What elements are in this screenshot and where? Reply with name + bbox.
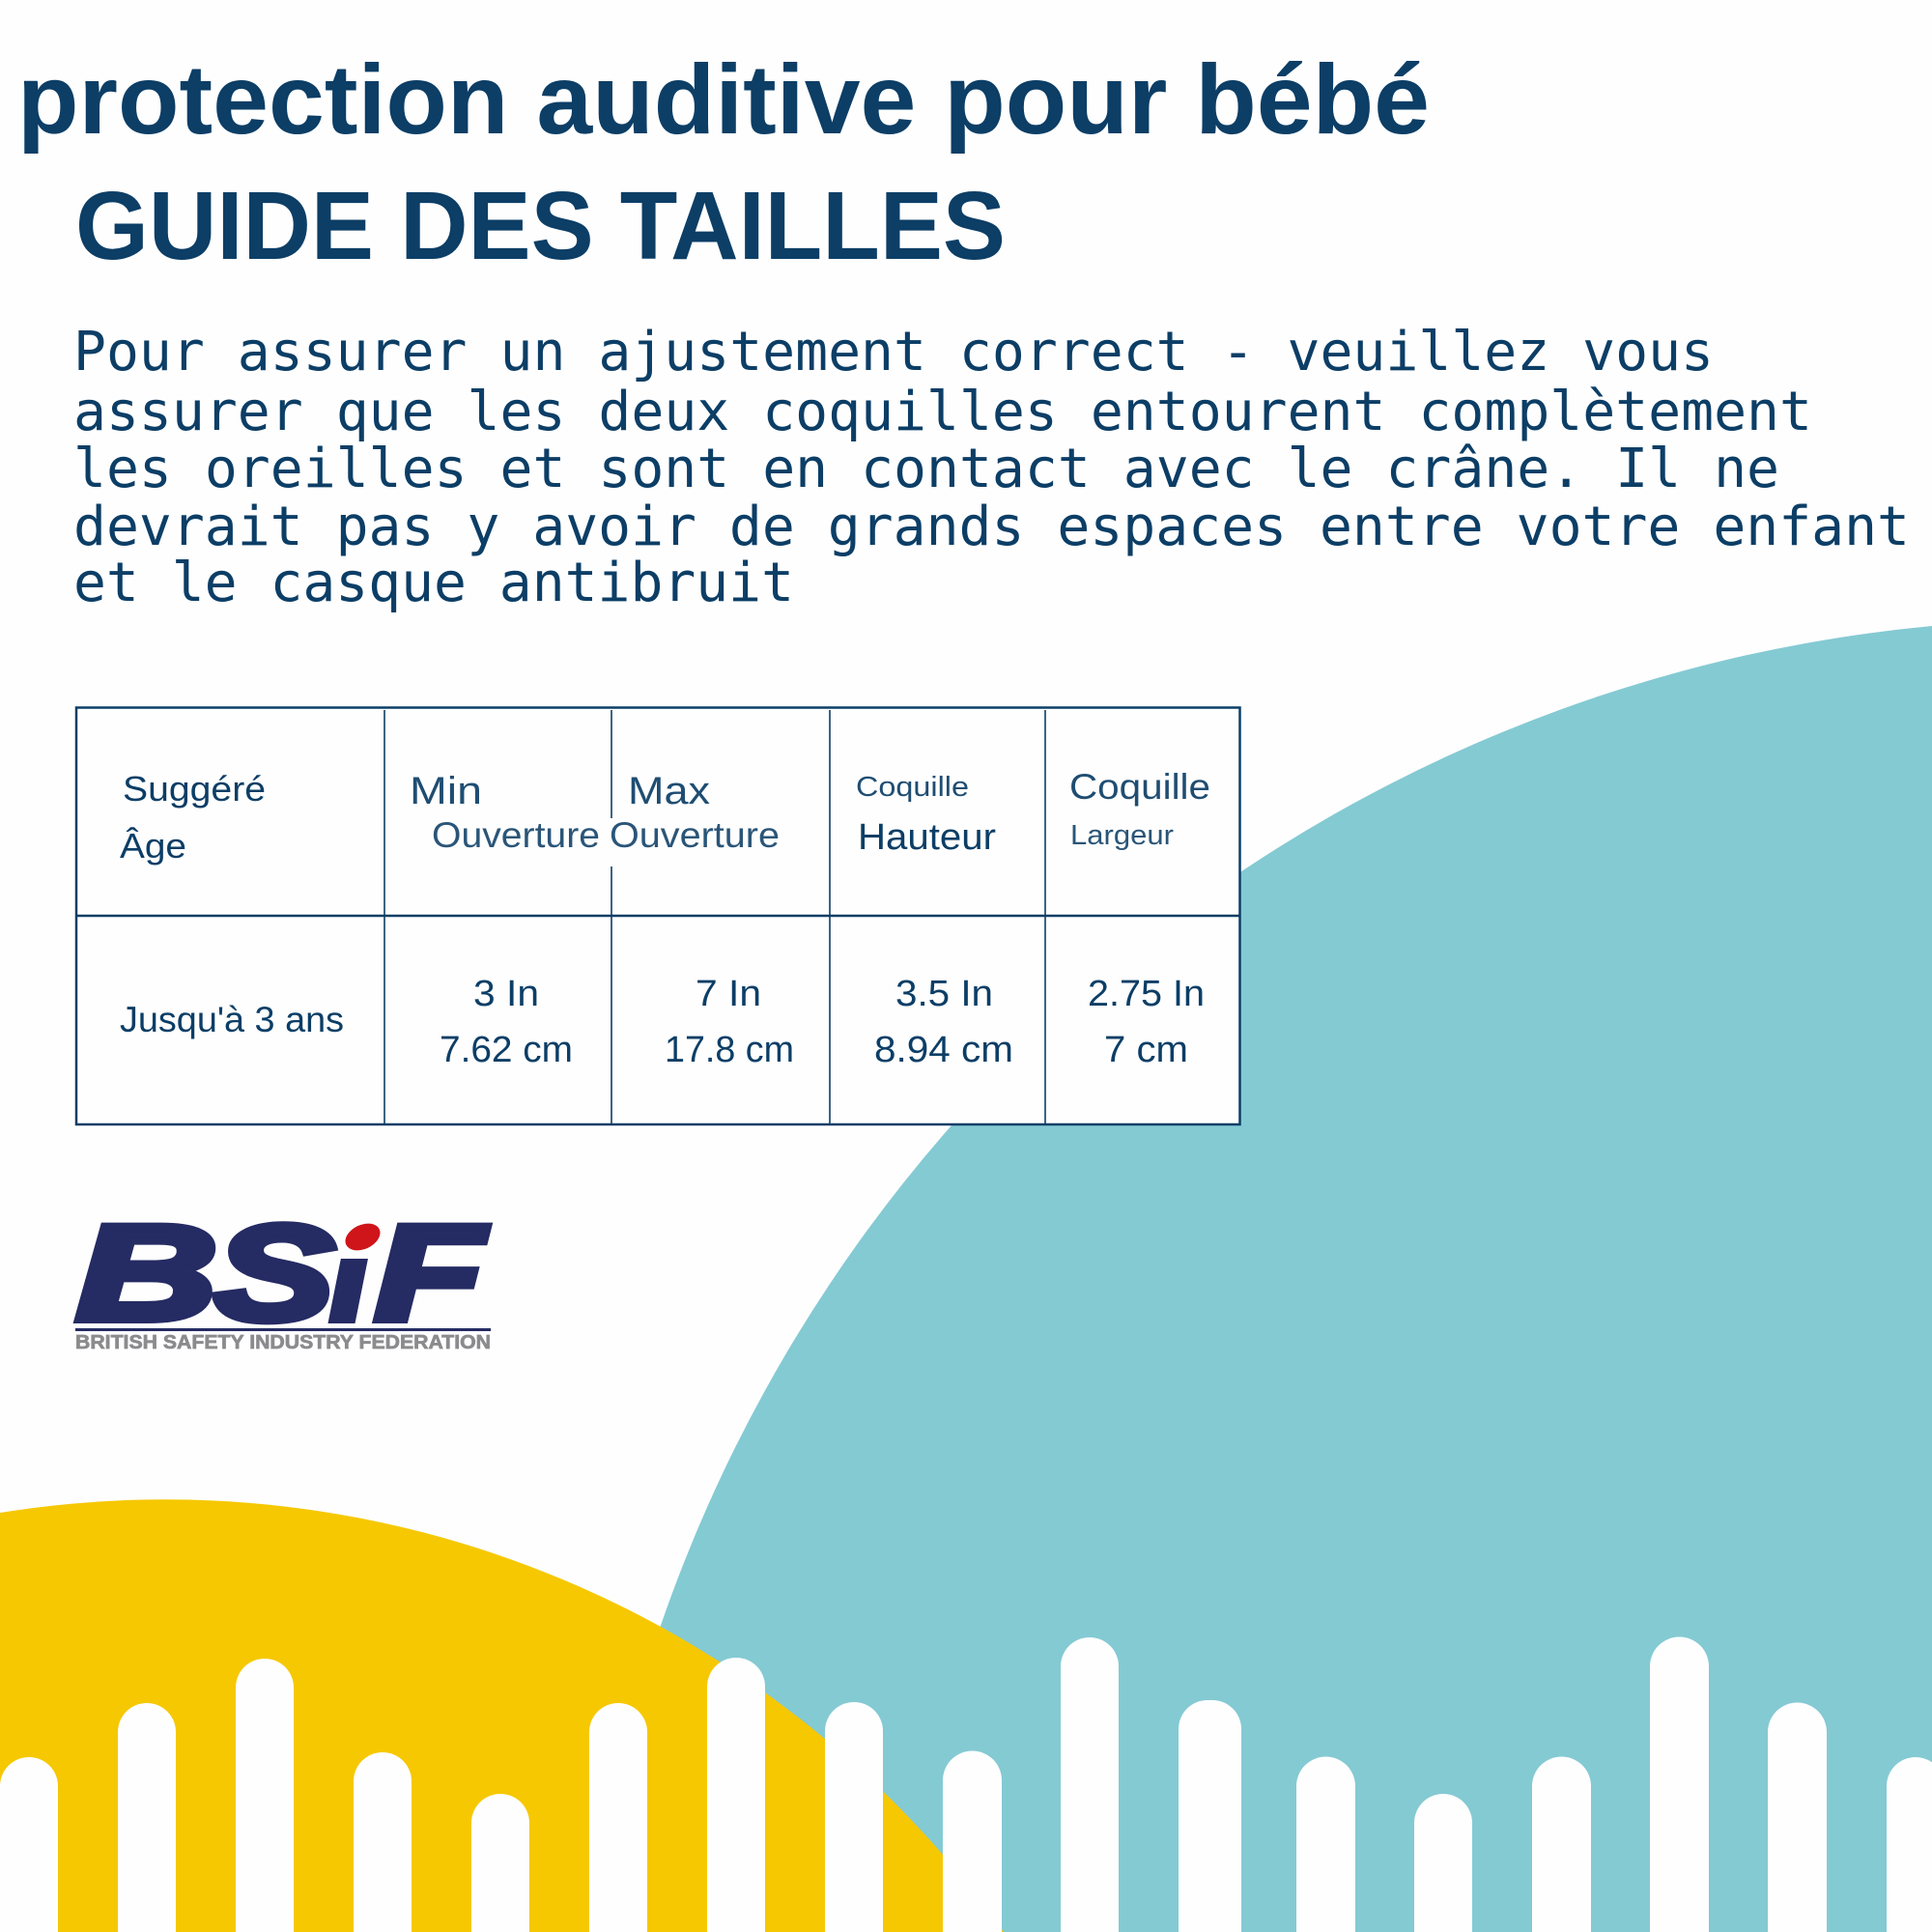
table header: suggested age: [120, 769, 266, 866]
table header: cup height: Coquille: [856, 772, 969, 803]
sound wave bars: [0, 1636, 1932, 1932]
table header: suggested age: Âge: [120, 826, 186, 866]
table value: max opening: 7 In: [696, 974, 761, 1014]
table header: cup width: Largeur: [1070, 820, 1174, 851]
table value: age: Jusqu'à 3 ans: [120, 1000, 344, 1039]
table value: cup height: 3.5 In: [895, 974, 993, 1014]
table value: cup height: 8.94 cm: [874, 1030, 1013, 1070]
table value: max opening: 17.8 cm: [665, 1030, 794, 1070]
table value: cup width: [1088, 974, 1205, 1070]
table value: cup width: 2.75 In: [1088, 974, 1205, 1014]
table value: min opening: 3 In: [473, 974, 539, 1014]
BSIF logo: F: [375, 1197, 488, 1349]
table header: cup width: [1069, 767, 1210, 851]
BSIF logo: BRITISH SAFETY INDUSTRY FEDERATION: [75, 1332, 491, 1353]
table header: max opening: Ouverture: [610, 815, 780, 855]
instructions text block: assurer que les deux coquilles entourent complètement: [73, 381, 1812, 443]
instructions text block: Pour assurer un ajustement correct - veuillez vous: [73, 321, 1714, 384]
BSIF logo: i: [330, 1197, 372, 1349]
table header: min opening: [410, 770, 600, 855]
table header: cup height: [856, 772, 996, 858]
BSIF logo: S: [214, 1197, 334, 1349]
title: protection auditive pour bébé: [17, 44, 1430, 155]
instructions text block: et le casque antibruit: [73, 552, 794, 614]
table header: cup width: Coquille: [1069, 767, 1210, 807]
heading: guide des tailles: GUIDE DES TAILLES: [75, 172, 1006, 280]
table value: cup width: 7 cm: [1104, 1030, 1188, 1070]
table value: cup height: [874, 974, 1013, 1070]
table value: max opening: [665, 974, 794, 1070]
table header: min opening: Min: [410, 770, 482, 812]
background circle: teal: [590, 626, 1932, 1932]
table header: suggested age: Suggéré: [123, 769, 266, 809]
instructions text block: les oreilles et sont en contact avec le crâne. Il ne: [73, 438, 1779, 500]
table header: max opening: [610, 770, 780, 855]
table value: min opening: 7.62 cm: [440, 1030, 573, 1070]
instructions text block: [73, 321, 1910, 614]
background circle: yellow: [0, 1499, 1004, 1932]
BSIF logo: B: [76, 1197, 217, 1349]
table header: cup height: Hauteur: [858, 817, 996, 858]
instructions text block: devrait pas y avoir de grands espaces entre votre enfant: [73, 496, 1910, 558]
table header: max opening: Max: [628, 770, 710, 812]
table value: min opening: [440, 974, 573, 1070]
size table: [76, 707, 1240, 1124]
BSIF logo: [75, 1197, 491, 1353]
table header: min opening: Ouverture: [432, 815, 600, 855]
